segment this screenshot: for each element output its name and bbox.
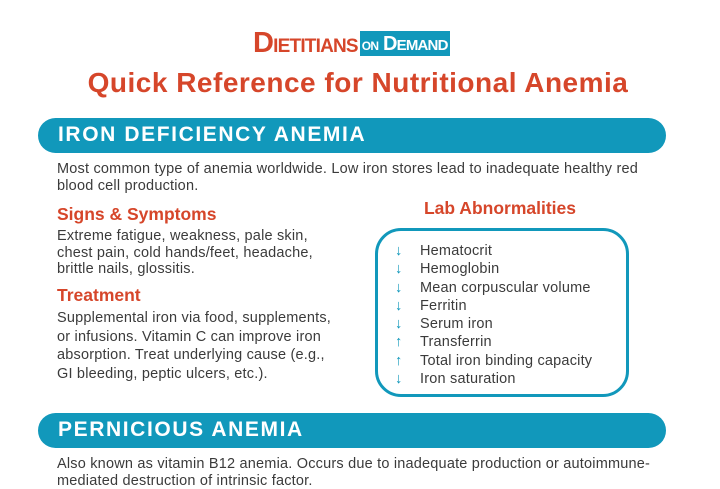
treatment text: GI bleeding, peptic ulcers, etc.). (57, 366, 268, 382)
lab box: ↓ (395, 298, 402, 314)
heading: signs & symptoms: Signs & Symptoms (57, 204, 216, 224)
lab box: Hemoglobin (420, 261, 499, 277)
banner: iron deficiency anemia (38, 118, 666, 153)
banner: iron deficiency anemia: IRON DEFICIENCY ANEMIA (58, 123, 366, 146)
logo (253, 27, 450, 59)
logo: DIETITIANS (253, 27, 358, 59)
pernicious text: mediated destruction of intrinsic factor. (57, 472, 313, 488)
pernicious text: Also known as vitamin B12 anemia. Occurs due to inadequate production or autoimmune- (57, 456, 650, 472)
lab box: ↑ (395, 334, 402, 350)
treatment text (57, 310, 331, 382)
intro text: Most common type of anemia worldwide. Low iron stores lead to inadequate healthy red (57, 161, 638, 177)
lab box: ↑ (395, 353, 402, 369)
signs text: brittle nails, glossitis. (57, 261, 195, 277)
heading: lab abnormalities: Lab Abnormalities (424, 198, 576, 218)
lab box: Iron saturation (420, 371, 516, 387)
heading: treatment: Treatment (57, 285, 141, 305)
title: Quick Reference for Nutritional Anemia (88, 67, 628, 98)
lab box: ↓ (395, 371, 402, 387)
lab box: Hematocrit (420, 243, 492, 259)
pernicious text (57, 456, 650, 488)
lab box (375, 228, 629, 397)
lab box: ↓ (395, 316, 402, 332)
lab box: ↓ (395, 280, 402, 296)
lab box: Transferrin (420, 334, 492, 350)
intro text: blood cell production. (57, 178, 198, 194)
banner: pernicious anemia: PERNICIOUS ANEMIA (58, 418, 304, 441)
treatment text: Supplemental iron via food, supplements, (57, 310, 331, 326)
signs text: chest pain, cold hands/feet, headache, (57, 244, 313, 260)
lab box: ↓ (395, 243, 402, 259)
intro text (57, 161, 638, 194)
signs text: Extreme fatigue, weakness, pale skin, (57, 228, 308, 244)
lab box: ↓ (395, 261, 402, 277)
lab box: Mean corpuscular volume (420, 280, 591, 296)
signs text (57, 228, 313, 277)
treatment text: absorption. Treat underlying cause (e.g., (57, 347, 325, 363)
logo: ON DEMAND (362, 33, 448, 55)
treatment text: or infusions. Vitamin C can improve iron (57, 328, 321, 344)
banner: pernicious anemia (38, 413, 666, 448)
lab box: Total iron binding capacity (420, 353, 592, 369)
lab box: Ferritin (420, 298, 467, 314)
lab box: Serum iron (420, 316, 493, 332)
